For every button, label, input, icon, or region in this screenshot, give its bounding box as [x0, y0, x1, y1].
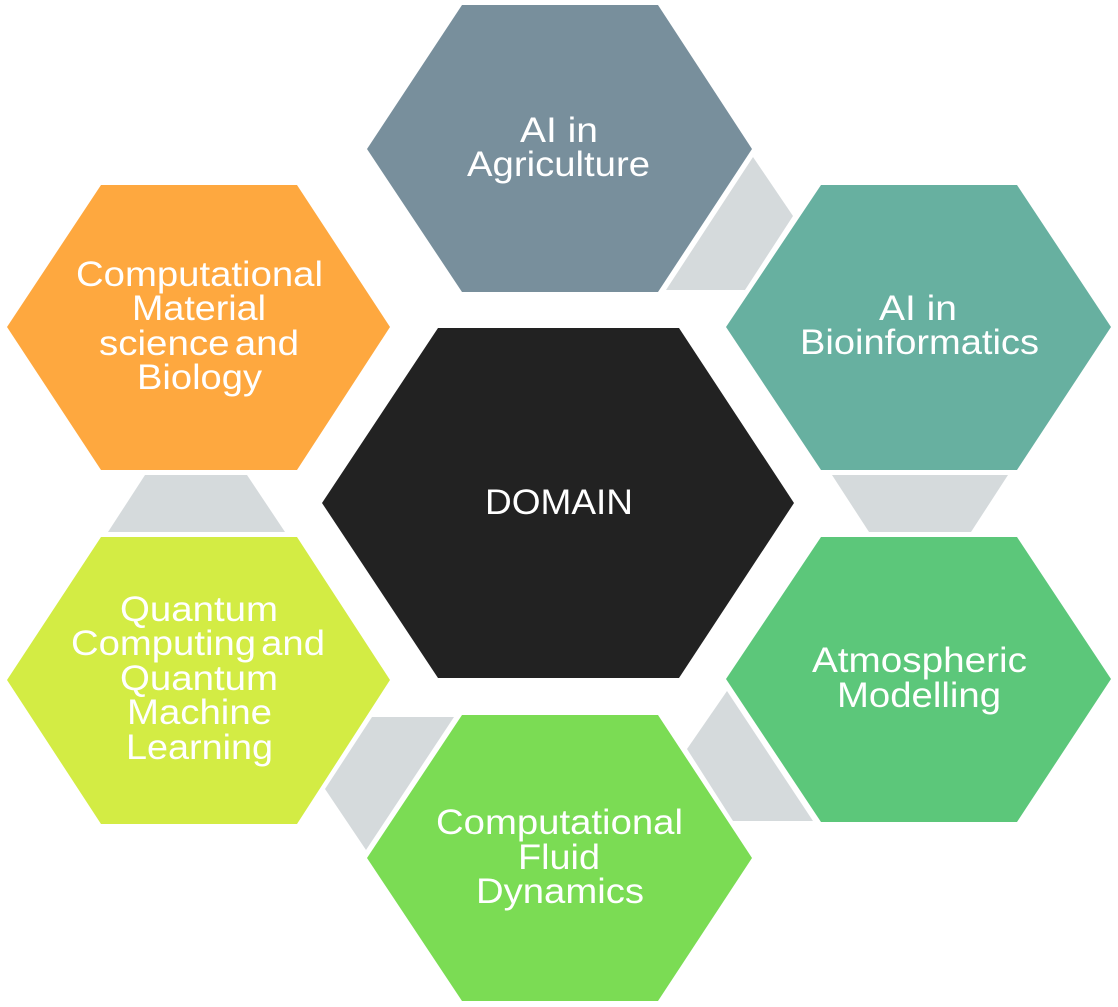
connector: quantum computing to material science	[108, 475, 285, 532]
panel: Quantum Computing and Quantum Machine Learning: Computing and	[71, 624, 325, 663]
panel: Computational Material science and Biology: Biology	[137, 358, 263, 397]
panel: Computational Fluid Dynamics: Fluid	[518, 838, 600, 877]
panel: Quantum Computing and Quantum Machine Learning	[7, 537, 390, 824]
connector: atmospheric modelling to fluid dynamics	[687, 691, 813, 821]
panel: Quantum Computing and Quantum Machine Learning: Quantum	[120, 590, 278, 629]
panel: Computational Material science and Biology: Computational	[76, 255, 323, 294]
connector: fluid dynamics to quantum computing	[325, 717, 454, 850]
panel: Computational Material science and Biology: Material	[132, 289, 266, 328]
panel: Computational Fluid Dynamics	[367, 715, 752, 1001]
panel: Quantum Computing and Quantum Machine Learning: Learning	[126, 728, 273, 767]
panel: central DOMAIN hexagon: DOMAIN	[485, 483, 633, 522]
panel: Atmospheric Modelling: Atmospheric	[812, 641, 1027, 680]
panel: Computational Fluid Dynamics: Dynamics	[476, 872, 644, 911]
panel: AI in Agriculture	[367, 5, 752, 292]
connector: bioinformatics to atmospheric modelling	[832, 475, 1008, 532]
panel: Atmospheric Modelling	[726, 537, 1111, 822]
panel: central DOMAIN hexagon	[322, 328, 794, 678]
panel: Computational Material science and Biology	[7, 185, 390, 470]
panel: AI in Agriculture: AI in	[520, 111, 598, 150]
connector: agriculture to bioinformatics	[666, 157, 793, 290]
panel: Atmospheric Modelling: Modelling	[837, 676, 1001, 715]
panel: AI in Bioinformatics	[726, 185, 1111, 470]
panel: AI in Bioinformatics: Bioinformatics	[800, 323, 1039, 362]
panel: Quantum Computing and Quantum Machine Learning: Machine	[127, 693, 272, 732]
panel: AI in Bioinformatics: AI in	[879, 289, 957, 328]
panel: Quantum Computing and Quantum Machine Learning: Quantum	[120, 659, 278, 698]
panel: Computational Material science and Biology: science and	[99, 324, 299, 363]
panel: Computational Fluid Dynamics: Computational	[436, 803, 683, 842]
panel: AI in Agriculture: Agriculture	[467, 145, 650, 184]
